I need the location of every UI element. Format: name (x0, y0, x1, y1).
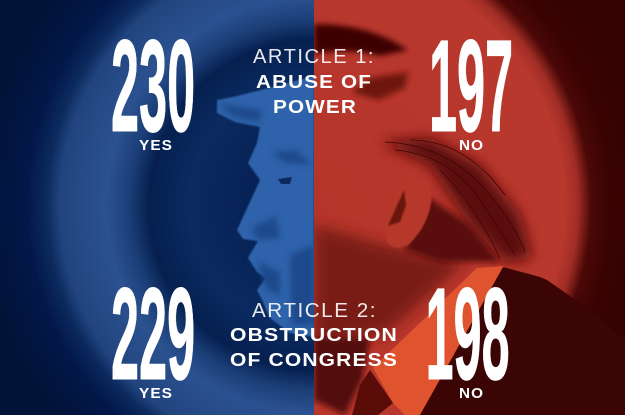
shadow behind ear (405, 195, 500, 262)
blue face profile (217, 76, 314, 337)
article 1 title: ARTICLE 1: (253, 45, 375, 68)
article 2 title: OBSTRUCTION (230, 325, 398, 345)
article 2 title (230, 299, 398, 370)
panel: red right half with head and jacket (314, 0, 625, 415)
shadow in hair under title (352, 72, 408, 100)
necktie (352, 370, 393, 415)
beard and jaw shadow (314, 225, 465, 345)
article 2 results (111, 262, 510, 408)
229 yes count: 229 (111, 262, 195, 408)
article 1 title: POWER (273, 97, 357, 117)
197 no count: 197 (429, 14, 513, 160)
article 1 results (111, 14, 513, 160)
article 1 title (253, 45, 375, 117)
230 yes count: 230 (111, 14, 195, 160)
dark arc above the hair (314, 24, 408, 56)
panel: blue left half with blurred seal (0, 0, 314, 415)
230 yes count: YES (139, 138, 173, 154)
shirt collar (373, 266, 504, 415)
article 2 title: OF CONGRESS (230, 350, 398, 370)
swept hair shadows (380, 138, 532, 262)
198 no count: 198 (426, 262, 510, 408)
198 no count: NO (459, 386, 484, 402)
ear (386, 194, 432, 248)
229 yes count: YES (139, 386, 173, 402)
article 1 title: ABUSE OF (256, 72, 372, 92)
197 no count: NO (459, 138, 484, 154)
dark jacket (420, 267, 583, 415)
article 2 title: ARTICLE 2: (252, 299, 377, 322)
